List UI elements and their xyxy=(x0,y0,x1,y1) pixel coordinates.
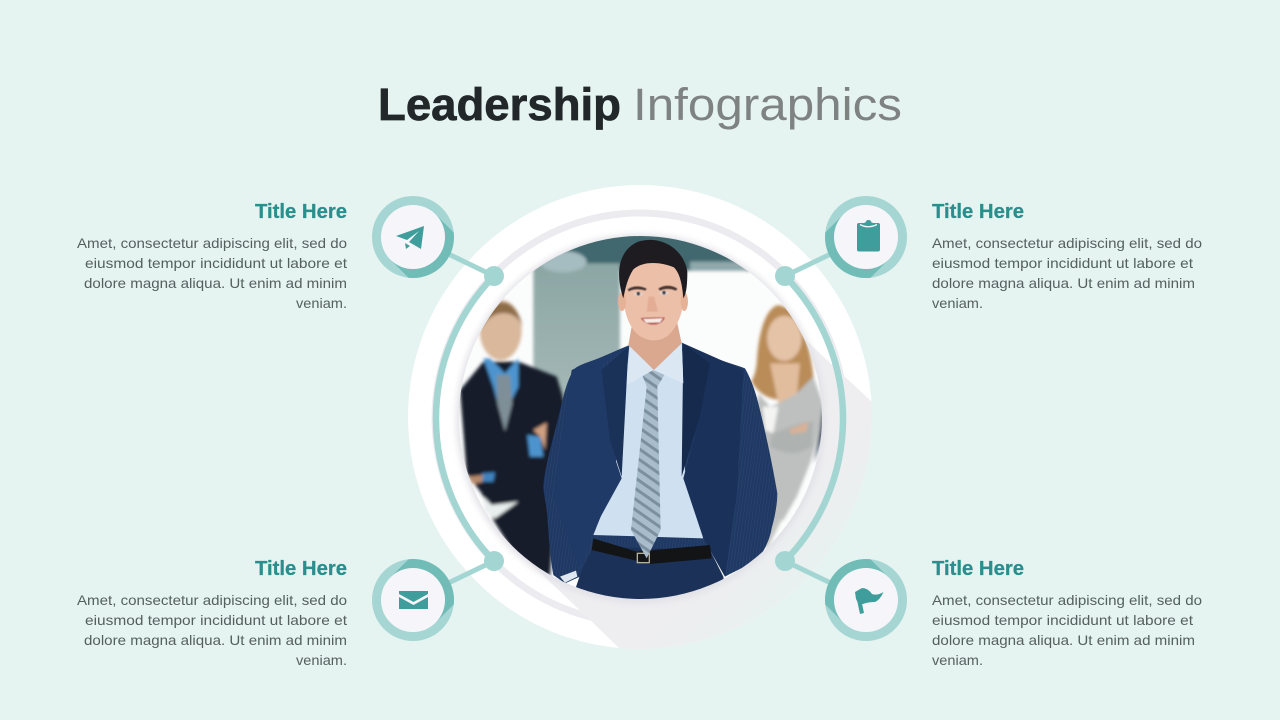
body text: dolore magna aliqua. Ut enim ad minim xyxy=(932,633,1195,648)
main man: cuff xyxy=(560,571,577,583)
icon: envelope xyxy=(372,559,454,641)
white inner disc xyxy=(438,216,842,620)
body text: dolore magna aliqua. Ut enim ad minim xyxy=(932,276,1195,291)
heading: Title Here xyxy=(255,558,347,580)
main man: belt xyxy=(592,538,712,564)
body text: Amet, consectetur adipiscing elit, sed do xyxy=(77,236,347,251)
main man: jacket xyxy=(543,343,777,583)
body text: dolore magna aliqua. Ut enim ad minim xyxy=(84,276,347,291)
body text: eiusmod tempor incididunt ut labore et xyxy=(85,256,347,271)
heading: Title Here xyxy=(255,201,347,223)
photo: three business people xyxy=(450,230,830,610)
title: Leadership xyxy=(378,79,621,130)
item 4: bottom right xyxy=(825,559,1202,665)
outer white disc xyxy=(408,185,872,649)
body text xyxy=(932,593,1202,668)
man left xyxy=(460,300,565,577)
main man: hair xyxy=(619,240,687,298)
body text: eiusmod tempor incididunt ut labore et xyxy=(932,613,1193,628)
main man: collar xyxy=(627,342,683,385)
main man: lapel shadows xyxy=(682,343,710,477)
long shadow xyxy=(540,342,872,649)
body text: veniam. xyxy=(296,653,347,668)
main man: left jacket front xyxy=(553,345,629,570)
icon: clipboard xyxy=(825,196,907,278)
icon: flag xyxy=(825,559,907,641)
connector lines xyxy=(413,237,866,600)
body text xyxy=(77,236,347,311)
main man: face xyxy=(623,260,684,340)
body text xyxy=(932,236,1202,311)
main man: trousers xyxy=(576,548,724,599)
title: Infographics xyxy=(633,79,902,130)
body text: dolore magna aliqua. Ut enim ad minim xyxy=(84,633,347,648)
main man: tie xyxy=(631,369,665,558)
title xyxy=(378,79,902,130)
body text: eiusmod tempor incididunt ut labore et xyxy=(85,613,347,628)
teal ring arcs xyxy=(436,276,843,561)
main man: right jacket front xyxy=(682,343,743,577)
item 2: top right xyxy=(806,196,1202,311)
icon: paper plane xyxy=(372,196,454,278)
central circular graphic xyxy=(408,185,872,649)
item 3: bottom left xyxy=(77,559,454,665)
main man: neck xyxy=(628,320,682,370)
body text: veniam. xyxy=(932,296,983,311)
body text: veniam. xyxy=(296,296,347,311)
main man: eyes and brows xyxy=(628,286,677,325)
body text xyxy=(77,593,347,668)
body text: Amet, consectetur adipiscing elit, sed do xyxy=(77,593,347,608)
heading: Title Here xyxy=(932,201,1024,223)
main man: shirt xyxy=(593,342,703,538)
body text: eiusmod tempor incididunt ut labore et xyxy=(932,256,1193,271)
connector nodes xyxy=(484,266,795,571)
woman xyxy=(750,305,825,550)
photo halo xyxy=(456,234,824,602)
item 1: top left xyxy=(77,196,473,311)
grey inner ring xyxy=(432,210,848,626)
body text: Amet, consectetur adipiscing elit, sed do xyxy=(932,236,1202,251)
body text: veniam. xyxy=(932,653,983,668)
body text: Amet, consectetur adipiscing elit, sed do xyxy=(932,593,1202,608)
heading: Title Here xyxy=(932,558,1024,580)
